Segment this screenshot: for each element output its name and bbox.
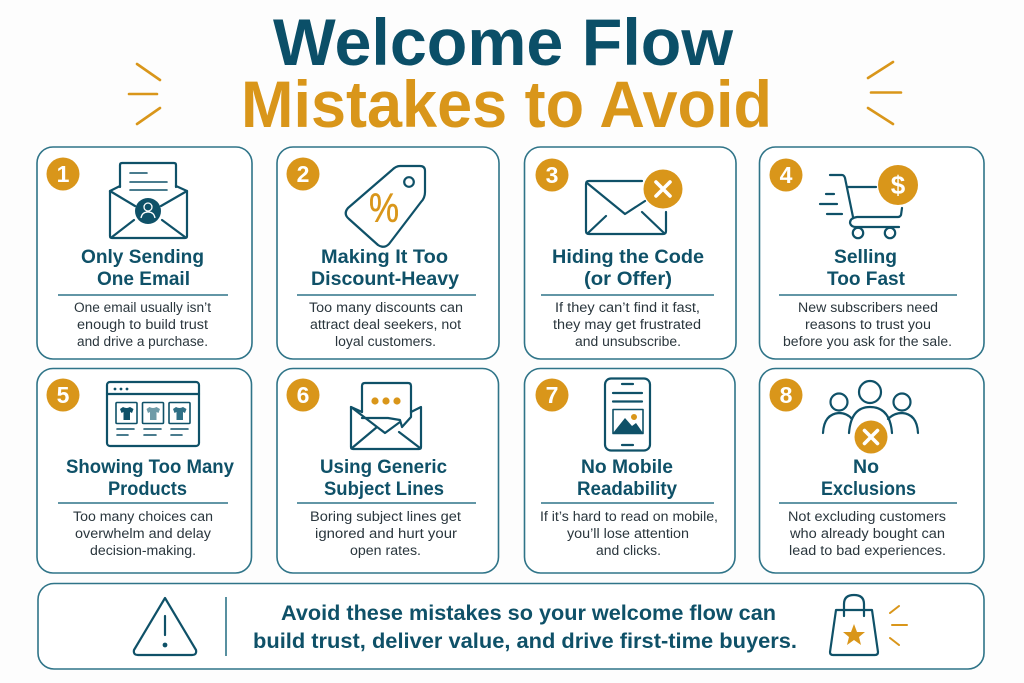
description [309,300,463,349]
heading: Discount-Heavy [311,269,459,290]
description: lead to bad experiences. [789,543,946,558]
icon: envelope with letter and person [110,163,187,238]
badge 3 [536,158,568,192]
heading: No Mobile [581,457,673,478]
description [788,509,946,558]
icon: mobile phone [605,378,650,450]
description [310,509,461,558]
icon: discount tag: % [369,185,399,231]
description: before you ask for the sale. [783,334,952,349]
heading: Exclusions [821,479,916,500]
heading: Using Generic [320,457,447,478]
description: If it’s hard to read on mobile, [540,509,718,524]
badge 7 [536,378,568,412]
badge 8 [770,378,802,412]
description: One email usually isn’t [74,300,211,315]
heading: One Email [97,269,190,290]
badge 6: 6 [297,382,309,408]
panel: mistake 4 [760,147,984,359]
badge 5: 5 [57,382,70,408]
description [783,300,952,349]
description: enough to build trust [77,317,208,332]
description: and clicks. [596,543,661,558]
description: New subscribers need [798,300,938,315]
heading: Hiding the Code [552,247,704,268]
badge 5 [46,378,80,412]
description: they may get frustrated [553,317,701,332]
icon: left sparkle rays [129,64,160,124]
icon: shopping cart with dollar [820,165,918,238]
heading [311,247,459,290]
heading [81,247,204,290]
heading: (or Offer) [584,269,672,290]
badge 6 [286,378,320,412]
panel: mistake 2 [277,147,499,359]
description: open rates. [350,543,421,558]
heading: Showing Too Many [66,457,234,478]
description: If they can’t find it fast, [555,300,700,315]
heading: Products [108,479,187,500]
heading: Subject Lines [324,479,444,500]
badge 3: 3 [546,162,558,188]
description: overwhelm and delay [75,526,211,541]
banner message: Avoid these mistakes so your welcome flow can [281,602,776,625]
description: Not excluding customers [788,509,946,524]
panel: bottom banner [38,584,984,669]
icon: shopping bag with star [830,595,878,655]
icon: browser with products [107,382,199,446]
icon: shopping cart with dollar: $ [891,170,906,200]
badge 8: 8 [780,382,793,408]
badge 7: 7 [546,382,558,408]
panel: mistake 1 [37,147,252,359]
heading [827,247,906,290]
banner message: build trust, deliver value, and drive first-time buyers. [253,630,797,653]
badge 2: 2 [297,161,309,187]
banner message [253,602,797,653]
badge 4 [770,158,802,192]
description: attract deal seekers, not [310,317,461,332]
icon: discount tag [346,166,425,247]
title: Welcome Flow [273,5,734,79]
description: decision-making. [90,543,196,558]
panel: mistake 8 [760,368,984,573]
panel: mistake 6 [277,368,498,573]
panel: mistake 3 [524,147,736,359]
description: and unsubscribe. [575,334,681,349]
heading [577,457,677,500]
description [74,300,211,349]
heading [552,247,704,290]
description [553,300,701,349]
description: who already bought can [789,526,945,541]
title: Mistakes to Avoid [241,67,772,141]
description: Boring subject lines get [310,509,461,524]
icon: right sparkle rays [868,62,901,124]
panel: mistake 7 [524,368,735,573]
badge 1 [46,158,80,190]
badge 2 [286,158,320,190]
description: and drive a purchase. [77,334,208,349]
icon: people with x badge [823,381,918,454]
description [540,509,718,558]
description: loyal customers. [335,334,436,349]
description: you’ll lose attention [567,526,689,541]
description: ignored and hurt your [315,526,458,541]
heading [66,457,234,500]
heading: Making It Too [321,247,448,268]
heading: Only Sending [81,247,204,268]
badge 1: 1 [57,161,70,187]
heading: Selling [834,247,897,268]
icon: envelope with x badge [586,170,682,234]
icon: envelope with chat bubble [351,383,421,449]
panel: mistake 5 [37,368,252,573]
description [73,509,213,558]
title [241,5,772,141]
badge 4: 4 [780,162,793,188]
icon: bag sparkle rays [890,606,907,645]
description: Too many choices can [73,509,213,524]
icon: warning triangle [134,598,196,655]
heading: Too Fast [827,269,906,290]
heading: No [853,457,879,478]
heading [320,457,447,500]
heading: Readability [577,479,677,500]
description: Too many discounts can [309,300,463,315]
description: reasons to trust you [805,317,931,332]
heading [821,457,916,500]
